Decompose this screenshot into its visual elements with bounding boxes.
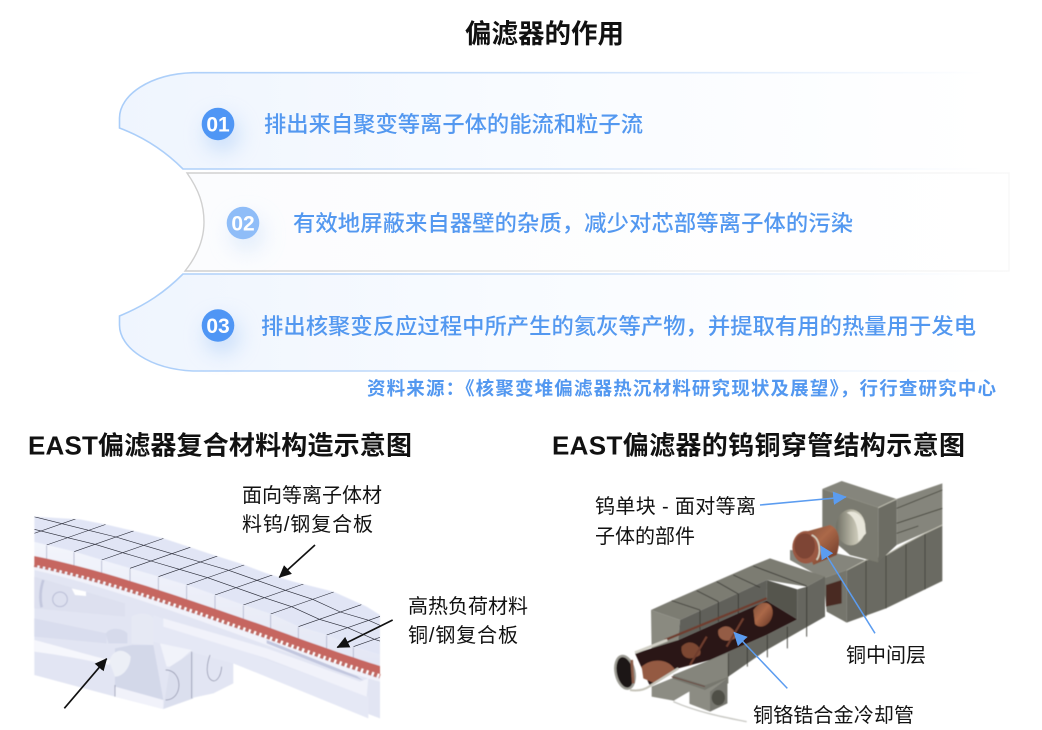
lower block: [790, 550, 865, 578]
label: high heat flux material: 铜/钢复合板: [408, 624, 518, 647]
badge 03: [202, 309, 239, 353]
tile gaps: [47, 545, 353, 663]
label: tungsten monoblock: 子体的部件: [595, 525, 695, 548]
badge 02: [227, 207, 264, 251]
label: plasma facing material: 料钨/钢复合板: [242, 513, 373, 536]
label: high heat flux material: [408, 595, 528, 647]
divertor body: [34, 567, 380, 718]
band 03 shape: [120, 274, 985, 371]
front block side faces: [673, 577, 825, 685]
diagram: EAST divertor composite section: [20, 515, 416, 718]
near block top: [673, 653, 728, 685]
tile grid lines: [34, 516, 380, 647]
black arrow: heat load plate: [337, 620, 393, 647]
bottom bracket: [652, 677, 747, 722]
panel: function 01: [120, 73, 985, 169]
label: tungsten monoblock: 钨单块 - 面对等离: [595, 495, 756, 518]
title: 偏滤器的作用: [465, 19, 624, 49]
body upper rail: [34, 565, 380, 682]
blue arrow: copper interlayer: [821, 546, 875, 633]
diagram: tungsten copper monoblock: [612, 481, 942, 722]
text 02: 有效地屏蔽来自器壁的杂质，减少对芯部等离子体的污染: [293, 211, 853, 236]
label: cooling tube: 铜铬锆合金冷却管: [753, 704, 914, 727]
heading: composite structure: EAST偏滤器复合材料构造示意图: [28, 430, 412, 460]
front block cut face: [767, 580, 797, 619]
blue arrow: tungsten block: [760, 497, 846, 505]
badge 03: 03: [206, 315, 230, 338]
front block wall: [678, 580, 767, 640]
label: tungsten monoblock: [595, 495, 756, 548]
label: plasma facing material: 面向等离子体材: [242, 484, 382, 507]
panel: function 02: [185, 173, 1009, 271]
badge 01: 01: [206, 114, 230, 136]
red heat-sink teeth: [34, 565, 380, 676]
tungsten monoblock: [822, 481, 897, 562]
cooling tube: [612, 598, 797, 691]
near block front: [672, 675, 728, 692]
label: copper interlayer: 铜中间层: [846, 644, 926, 667]
black arrow: tungsten plate: [279, 545, 315, 577]
panel: function 03: [120, 274, 985, 371]
label: plasma facing material: [242, 484, 382, 536]
band 02 shape: [185, 173, 1009, 271]
far tile row: [847, 483, 942, 623]
heading: monoblock structure: EAST偏滤器的钨铜穿管结构示意图: [552, 430, 965, 460]
band 01 shape: [120, 73, 985, 169]
left recess: [34, 577, 125, 617]
central boss: [132, 614, 153, 645]
front block left end: [651, 610, 680, 652]
red heat-sink layer: [34, 556, 380, 674]
copper interlayer: [792, 525, 839, 565]
source note: 资料来源：《核聚变堆偏滤器热沉材料研究现状及展望》，行行查研究中心: [367, 378, 996, 399]
black arrow: support: [64, 659, 107, 708]
tile top surface: [34, 517, 380, 655]
text 01: 排出来自聚变等离子体的能流和粒子流: [264, 112, 643, 137]
badge 02: 02: [231, 212, 255, 236]
label: high heat flux material: 高热负荷材料: [408, 595, 528, 618]
tile front faces: [34, 542, 380, 668]
lower arm: [153, 615, 368, 718]
blue arrow: cooling tube: [734, 632, 787, 688]
copper stub behind front block: [826, 580, 842, 607]
front block top: [651, 558, 825, 620]
badge 01: [202, 108, 239, 151]
text 03: 排出核聚变反应过程中所产生的氦灰等产物，并提取有用的热量用于发电: [261, 314, 976, 339]
